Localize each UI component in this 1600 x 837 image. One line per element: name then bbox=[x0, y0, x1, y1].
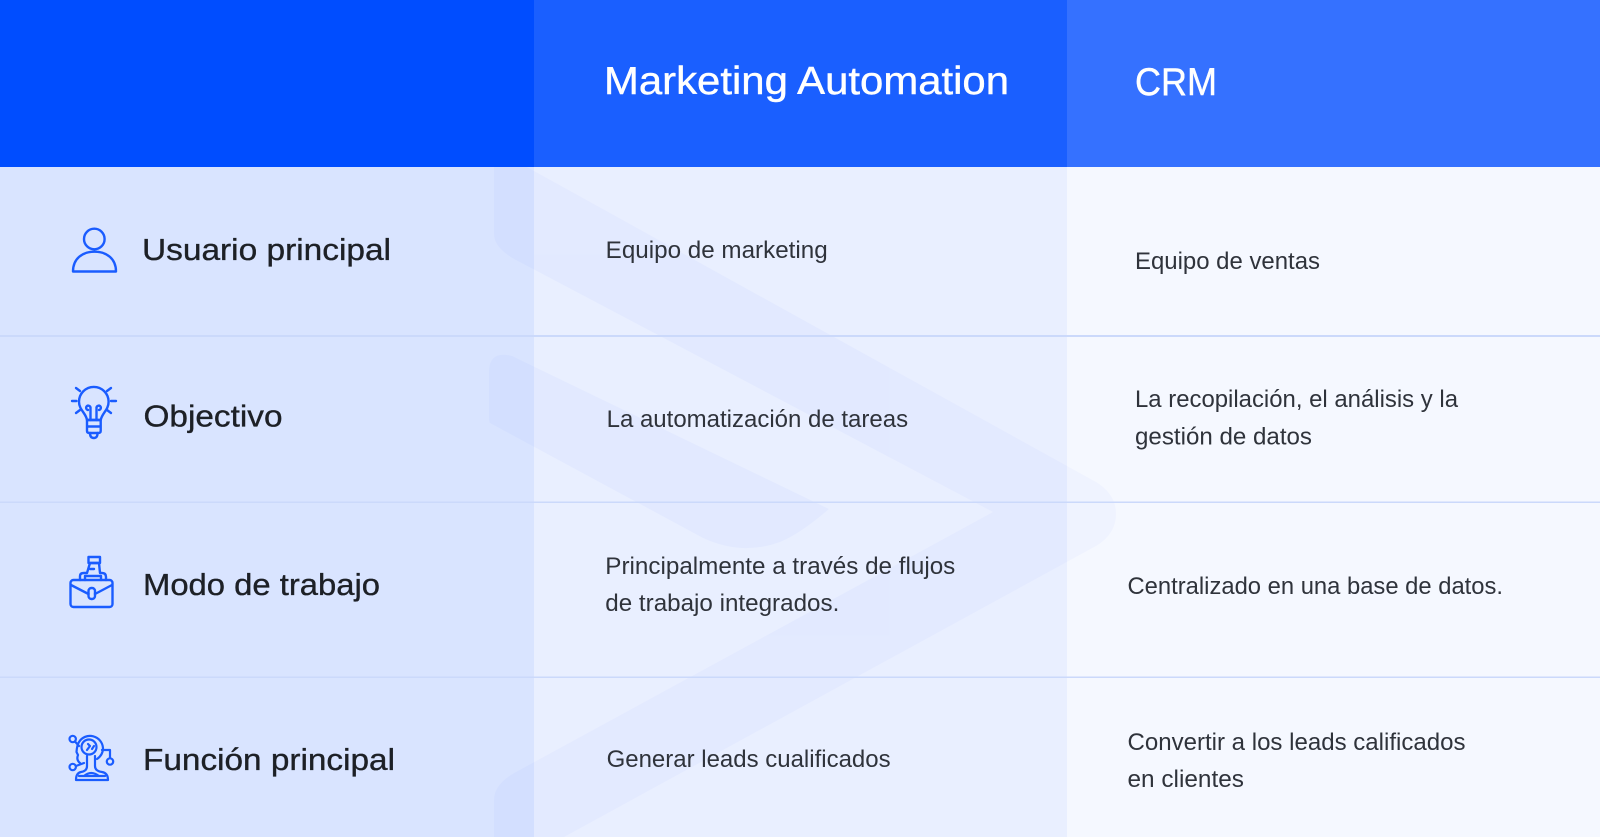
label: Objectivo: Objectivo bbox=[144, 398, 282, 434]
row dividers bbox=[0, 335, 1600, 678]
row: Modo de trabajo bbox=[70, 553, 1503, 617]
heading: CRM: CRM bbox=[1135, 61, 1217, 104]
label: Usuario principal: Usuario principal bbox=[142, 232, 391, 267]
cell: CRM work mode: Centralizado en una base de datos. bbox=[1128, 573, 1503, 600]
cell: Marketing Automation user: Equipo de marketing bbox=[606, 237, 828, 264]
icon: AI head bbox=[70, 736, 113, 780]
cell: CRM objective bbox=[1135, 386, 1459, 450]
watermark chevron logo bbox=[489, 166, 1116, 837]
cell: CRM objective: gestión de datos bbox=[1135, 424, 1312, 450]
cell: Marketing Automation objective: La automatización de tareas bbox=[607, 406, 908, 433]
cell: CRM objective: La recopilación, el análisis y la bbox=[1135, 386, 1459, 413]
icon: person bbox=[73, 229, 116, 272]
row: Usuario principal bbox=[73, 229, 1320, 275]
cell: Marketing Automation work mode bbox=[605, 553, 955, 617]
heading: Marketing Automation: Marketing Automation bbox=[604, 60, 1009, 103]
icon: light bulb bbox=[72, 387, 116, 438]
cell: CRM function: Convertir a los leads calificados bbox=[1128, 729, 1466, 756]
row: Objectivo bbox=[72, 386, 1459, 450]
icon: briefcase with hand bbox=[70, 557, 112, 607]
cell: CRM function: en clientes bbox=[1128, 766, 1244, 793]
row: Función principal bbox=[70, 729, 1466, 793]
cell: Marketing Automation work mode: Principalmente a través de flujos bbox=[605, 553, 955, 580]
label: Modo de trabajo: Modo de trabajo bbox=[143, 567, 380, 602]
cell: Marketing Automation work mode: de trabajo integrados. bbox=[605, 590, 839, 617]
label: Función principal: Función principal bbox=[143, 742, 395, 777]
header band bbox=[0, 0, 1600, 167]
cell: Marketing Automation function: Generar leads cualificados bbox=[607, 746, 891, 773]
cell: CRM user: Equipo de ventas bbox=[1135, 248, 1320, 275]
cell: CRM function bbox=[1128, 729, 1466, 793]
